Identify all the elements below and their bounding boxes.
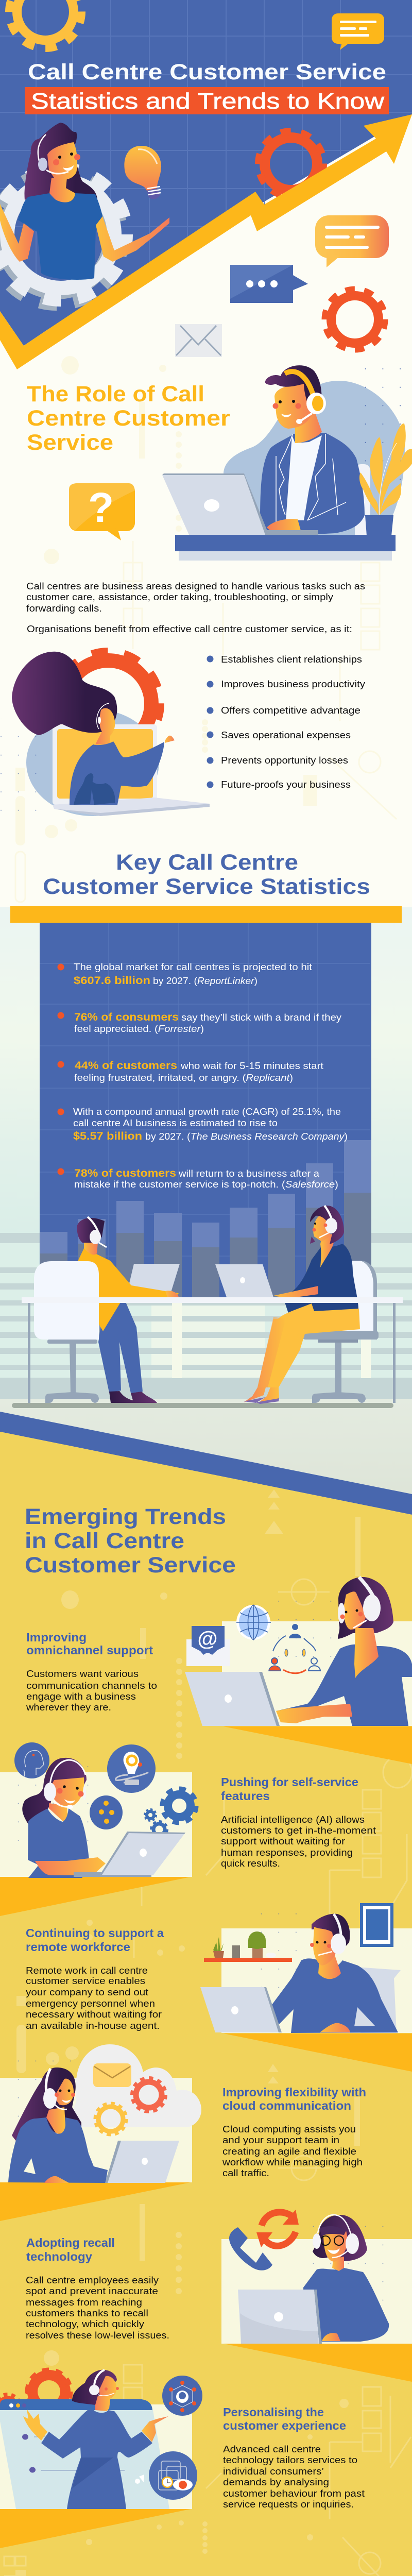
stat: AI business growth: $5.57 billion xyxy=(73,1130,142,1142)
section: personalising text: individual consumers’ xyxy=(223,2466,324,2477)
section: self-service features text: Pushing for self-service xyxy=(221,1775,358,1789)
section: improving omnichannel support text: Improving xyxy=(26,1631,87,1644)
stat: AI business growth: call centre AI business is estimated to rise to xyxy=(73,1118,278,1128)
stat: AI business growth: With a compound annual growth rate (CAGR) of 25.1%, the xyxy=(73,1107,341,1117)
icon: yellow gear top left xyxy=(9,0,81,48)
section: self-service features text: features xyxy=(221,1789,270,1803)
icon: white gear behind woman xyxy=(0,168,127,304)
section: improving omnichannel support text: communication channels to xyxy=(26,1681,157,1691)
section: personalising text xyxy=(223,2405,365,2510)
section: recall technology text: spot and prevent inaccurate xyxy=(26,2286,158,2296)
section: personalising text: Advanced call centre xyxy=(223,2444,321,2454)
text block: call centres intro: Call centres are business areas designed to handle various tasks such as xyxy=(26,581,365,591)
illustration: woman emerging from laptop xyxy=(0,652,210,819)
heading: key statistics: Key Call Centre xyxy=(116,850,298,875)
stat: 76 percent of consumers: feel appreciated. ( Forrester ) xyxy=(74,1024,204,1034)
background: cream page base xyxy=(0,0,412,909)
stat: 78 percent of customers: mistake if the customer service is top-notch. ( Salesforce ) xyxy=(74,1179,338,1190)
list: business benefits: Saves operational expenses xyxy=(221,730,351,740)
icon: blue chat box with dots xyxy=(230,265,308,303)
stat: 78 percent of customers: will return to a business after a xyxy=(178,1168,320,1179)
list: business benefits: Offers competitive advantage xyxy=(221,705,360,716)
stat: AI business growth xyxy=(58,1107,348,1142)
list: business benefits: Improves business productivity xyxy=(221,679,365,689)
heading: the role of call centre customer service: Centre Customer xyxy=(27,406,230,431)
icon: question mark bubble xyxy=(69,483,135,540)
section: cloud communication text: Cloud computing assists you xyxy=(222,2124,356,2134)
icon: big gradient chat bubble xyxy=(315,215,389,267)
section: cloud communication text: and your support team in xyxy=(222,2135,339,2145)
section: self-service features text: Artificial intelligence (AI) allows xyxy=(221,1815,365,1825)
section: personalising text: demands by analysing xyxy=(223,2477,329,2487)
illustration: self-service agent xyxy=(0,1742,196,1916)
heading: the role of call centre customer service: The Role of Call xyxy=(27,382,204,406)
section: improving omnichannel support text xyxy=(26,1631,157,1713)
stat: global market: The global market for call centres is projected to hit xyxy=(74,962,312,972)
section: recall technology text: messages from reaching xyxy=(26,2297,142,2308)
band: blue diagonal divider xyxy=(0,1412,412,1515)
arrow: rising yellow arrow xyxy=(0,114,412,369)
section: personalising text: customer experience xyxy=(223,2419,346,2432)
illustration: cloud communication agent xyxy=(0,2044,201,2221)
icon: speech bubble top right xyxy=(332,13,384,50)
icon: light bulb xyxy=(124,146,161,199)
stat: 44 percent of customers: feeling frustrated, irritated, or angry. ( Replicant ) xyxy=(74,1073,293,1083)
section: recall technology text: Adopting recall xyxy=(26,2236,115,2249)
panel: statistics blue panel xyxy=(40,923,371,1297)
illustration: personalisation agent xyxy=(0,2370,202,2548)
stat: 44 percent of customers: 44% of customers xyxy=(75,1060,177,1072)
section: remote workforce text: your company to send out xyxy=(26,1987,148,1997)
icon: orange gear behind arrow xyxy=(259,131,323,196)
list: business benefits: Establishes client relationships xyxy=(221,654,362,665)
text block: call centres intro: forwarding calls. xyxy=(26,603,102,614)
background: faint decoration yellow section xyxy=(4,1489,412,2576)
illustration: omnichannel agent: @ xyxy=(197,1628,218,1650)
section: improving omnichannel support text: omnichannel support xyxy=(26,1643,153,1657)
section: recall technology text xyxy=(26,2236,169,2341)
section: self-service features text: human responses, providing xyxy=(221,1848,353,1858)
stat: global market: by 2027. ( ReportLinker ) xyxy=(153,976,258,986)
section: self-service features text: customers to get in-the-moment xyxy=(221,1825,376,1836)
heading: key statistics xyxy=(43,850,370,899)
text block: call centres intro: customer care, assistance, order taking, troubleshooting, or simply xyxy=(26,592,333,602)
stat: AI business growth: by 2027. ( The Business Research Company ) xyxy=(145,1131,348,1142)
section: personalising text: customer behaviour from past xyxy=(223,2488,365,2499)
section: remote workforce text: remote workforce xyxy=(26,1940,130,1954)
section: improving omnichannel support text: Customers want various xyxy=(26,1669,139,1679)
section: personalising text: technology tailors services to xyxy=(223,2455,357,2465)
illustration: woman with headset xyxy=(0,123,169,280)
section: recall technology text: Call centre employees easily xyxy=(26,2275,159,2285)
heading: emerging trends: Emerging Trends xyxy=(25,1504,226,1529)
section: remote workforce text: an available in-house agent. xyxy=(26,2021,160,2031)
section: recall technology text: customers thanks to recall xyxy=(26,2308,148,2318)
heading: emerging trends: in Call Centre xyxy=(25,1529,184,1553)
title line 1: Call Centre Customer Service xyxy=(28,60,386,84)
stat: 76 percent of consumers: 76% of consumers xyxy=(74,1011,179,1023)
section: cloud communication text: workflow while managing high xyxy=(222,2157,363,2167)
section: recall technology text: technology xyxy=(26,2250,92,2263)
section: remote workforce text: customer service enables xyxy=(26,1976,145,1986)
illustration: recall technology agent xyxy=(221,2209,412,2382)
text block: call centres intro: Organisations benefit from effective call centre customer service, as it: xyxy=(27,624,352,634)
section: cloud communication text xyxy=(222,2086,366,2178)
heading: key statistics: Customer Service Statistics xyxy=(43,874,370,899)
list: business benefits: Future-proofs your business xyxy=(221,779,351,790)
section: remote workforce text: necessary without waiting for xyxy=(26,2009,162,2020)
section: cloud communication text: cloud communication xyxy=(222,2099,351,2112)
background: faint decoration cream section xyxy=(15,356,397,902)
heading: the role of call centre customer service: Service xyxy=(27,430,113,455)
list: business benefits: Prevents opportunity losses xyxy=(221,755,348,766)
section: cloud communication text: call traffic. xyxy=(222,2168,269,2178)
floor shadow xyxy=(12,1403,393,1408)
section: recall technology text: resolves these low-level issues. xyxy=(26,2330,169,2341)
text block: call centres intro xyxy=(26,581,365,634)
illustration: man at laptop with plant xyxy=(162,365,412,561)
stat: 76 percent of consumers: say they’ll stick with a brand if they xyxy=(181,1012,341,1023)
section: self-service features text: support without waiting for xyxy=(221,1836,345,1846)
section: remote workforce text: emergency personnel when xyxy=(26,1998,155,2009)
section: improving omnichannel support text: wherever they are. xyxy=(26,1702,111,1713)
heading: emerging trends: Customer Service xyxy=(25,1553,236,1578)
icon: question mark bubble: ? xyxy=(88,484,114,531)
section: self-service features text: quick results. xyxy=(221,1858,280,1869)
stat: global market xyxy=(58,962,312,987)
heading: emerging trends xyxy=(25,1504,236,1578)
section: recall technology text: technology, which quickly xyxy=(26,2319,144,2329)
title line 2 banner: Statistics and Trends to Know xyxy=(31,89,384,114)
section: cloud communication text: creating an agile and flexible xyxy=(222,2146,356,2157)
stat: 44 percent of customers: who wait for 5-15 minutes start xyxy=(180,1061,323,1071)
hero background: blue grid area xyxy=(0,0,412,346)
panel: yellow emerging trends background xyxy=(0,1432,412,2576)
chart: city skyline bars xyxy=(40,1140,371,1297)
illustration: remote worker at home xyxy=(200,1903,412,2072)
illustration: two agents at desk xyxy=(22,1206,403,1404)
yellow header bar xyxy=(10,906,402,923)
section: remote workforce text: Continuing to support a xyxy=(26,1926,164,1940)
list: business benefits xyxy=(207,654,365,790)
stat: 78 percent of customers xyxy=(58,1167,338,1190)
section: self-service features text xyxy=(221,1775,376,1869)
icon: orange gear lower right xyxy=(325,290,385,349)
heading: the role of call centre customer service xyxy=(27,382,230,455)
background: office scene with window blinds xyxy=(0,907,412,1517)
stat: 76 percent of consumers xyxy=(58,1011,341,1034)
section: remote workforce text xyxy=(26,1926,164,2031)
illustration: omnichannel agent xyxy=(185,1577,412,1764)
section: improving omnichannel support text: engage with a business xyxy=(26,1691,136,1702)
section: remote workforce text: Remote work in call centre xyxy=(26,1965,148,1976)
stat: global market: $607.6 billion xyxy=(74,975,150,987)
stat: 78 percent of customers: 78% of customers xyxy=(74,1167,176,1179)
section: cloud communication text: Improving flexibility with xyxy=(222,2086,366,2099)
section: personalising text: service requests or inquiries. xyxy=(223,2499,354,2510)
section: personalising text: Personalising the xyxy=(223,2405,324,2419)
stat: 44 percent of customers xyxy=(58,1060,323,1083)
icon: envelope xyxy=(175,324,222,357)
